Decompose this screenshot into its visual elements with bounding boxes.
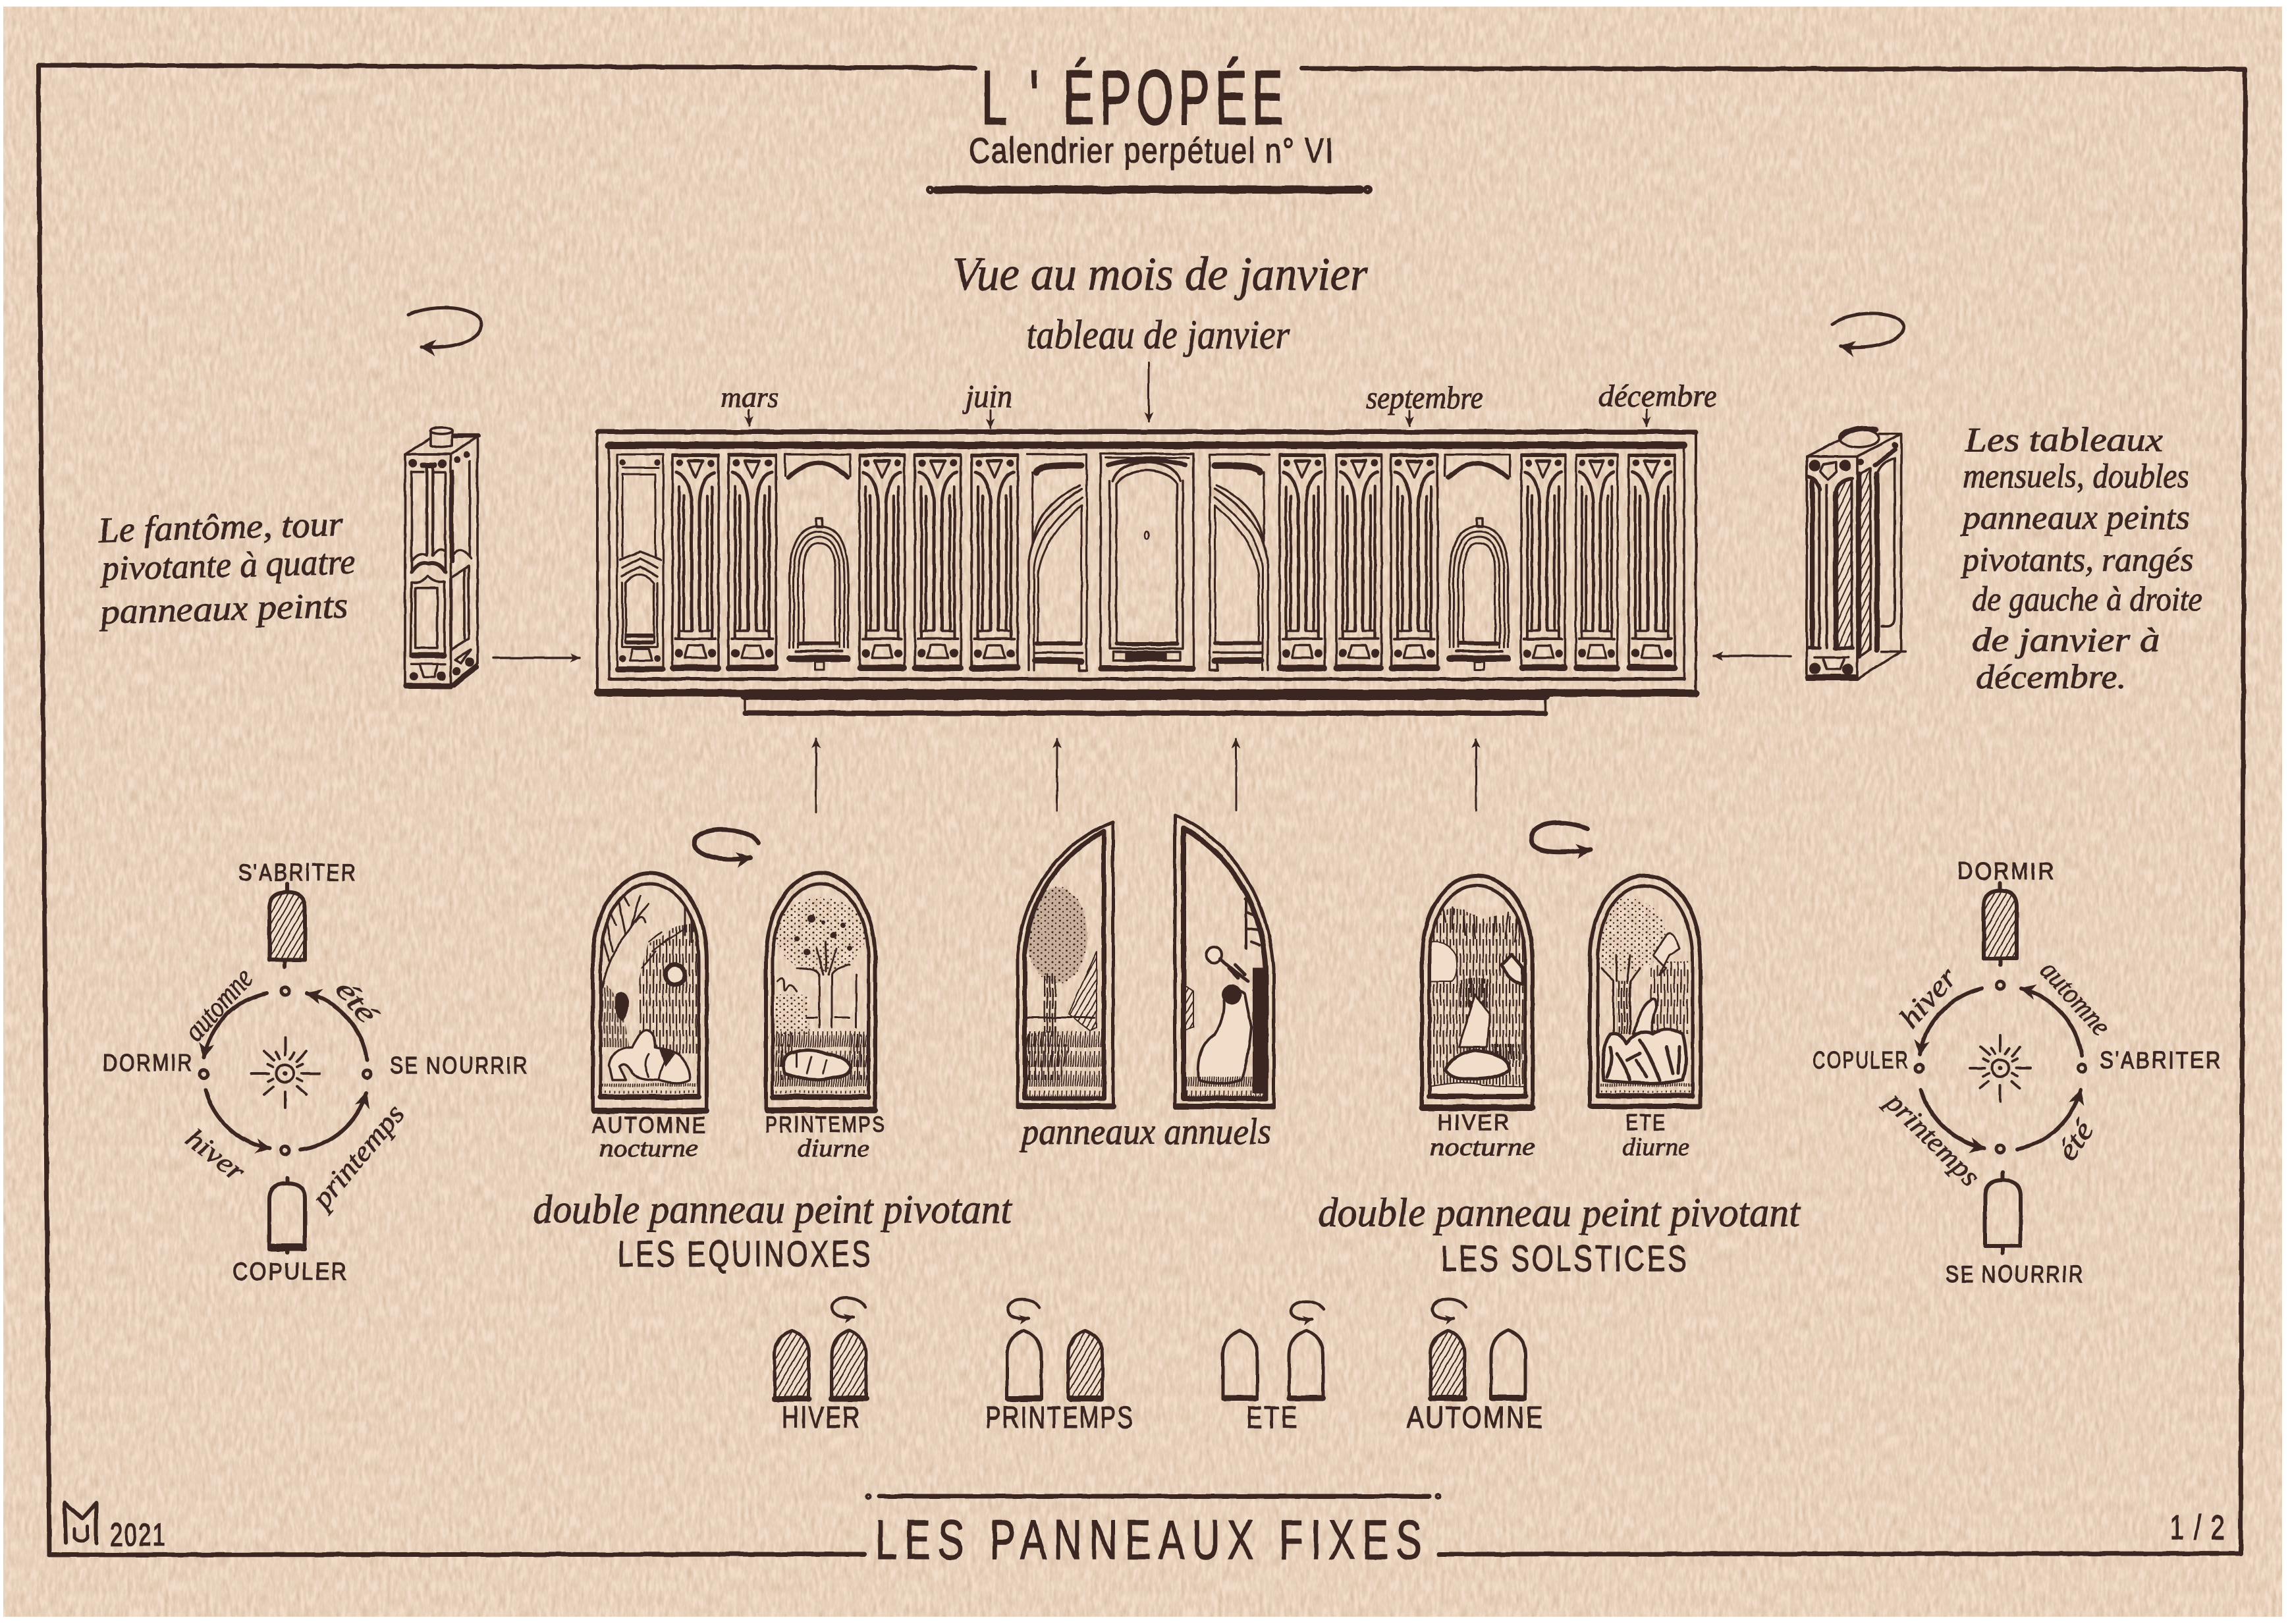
arched frame [1422, 876, 1533, 1108]
bell stems [269, 1178, 305, 1253]
title rule [928, 187, 1371, 192]
monthly panels [672, 454, 1675, 670]
bell: dormir hatched [1984, 883, 2017, 965]
panel 1: january tower face [617, 454, 663, 670]
label: copuler: COPULER [1813, 1046, 1909, 1073]
season key: été: ETE [1246, 1400, 1299, 1434]
month label: décembre: décembre [1598, 379, 1717, 414]
bell: se nourrir plain [1985, 1180, 2021, 1246]
sun icon [251, 1037, 319, 1108]
panel: été diurne [1589, 876, 1701, 1106]
label: été diurne: diurne [1622, 1133, 1689, 1161]
text: le fantôme: pivotante à quatre [99, 542, 356, 588]
rotation arrow: solstices [1531, 823, 1591, 852]
rotation arrow: ghost tower [408, 308, 481, 348]
monogram [65, 1503, 96, 1543]
cycle diagram: left [103, 859, 529, 1285]
scene [1589, 898, 1691, 1093]
month label: septembre: septembre [1366, 381, 1483, 416]
rotation arrow: equinoxes [695, 830, 759, 859]
sun icon [1970, 1035, 2031, 1101]
title: L ' ÉPOPÉE [981, 55, 1289, 140]
main calendar cabinet [597, 431, 1696, 715]
label: copuler: COPULER [232, 1258, 348, 1285]
cabinet frame [597, 431, 1696, 715]
heading: les equinoxes: LES EQUINOXES [618, 1233, 873, 1274]
arched frame [1590, 876, 1701, 1106]
center panel [1101, 454, 1193, 670]
label: s'abriter: S'ABRITER [238, 859, 357, 886]
subtitle: Calendrier perpétuel n° VI [969, 131, 1334, 171]
season: été: été [329, 973, 385, 1031]
label: se nourrir: SE NOURRIR [1946, 1260, 2085, 1287]
heading: les solstices: LES SOLSTICES [1441, 1237, 1689, 1279]
panel: printemps diurne [766, 873, 875, 1110]
label: panneaux annuels: panneaux annuels [1019, 1112, 1271, 1152]
label: dormir: DORMIR [103, 1049, 194, 1076]
season: été: été [2051, 1114, 2101, 1166]
season: automne: automne [177, 961, 259, 1047]
arrows up from panels to cabinet [816, 739, 1476, 812]
scene [1025, 886, 1101, 1098]
arched frame [1018, 822, 1113, 1108]
bell: copuler plain [269, 1183, 305, 1249]
season: hiver: hiver [1893, 961, 1963, 1035]
label: printemps diurne: PRINTEMPS [765, 1112, 886, 1137]
label: hiver nocturne [1430, 1110, 1535, 1161]
footer title: LES PANNEAUX FIXES [875, 1509, 1429, 1571]
label: automne nocturne: nocturne [599, 1135, 698, 1162]
label: tableau de janvier: tableau de janvier [1026, 313, 1290, 358]
scene [601, 894, 699, 1095]
heading: vue au mois de janvier: Vue au mois de janvier [952, 248, 1369, 300]
year: 2021 [110, 1518, 167, 1553]
season: automne: automne [2034, 954, 2117, 1042]
illustration: right tower [1807, 429, 1905, 680]
season: hiver: hiver [179, 1122, 252, 1188]
month label: juin: juin [962, 377, 1012, 414]
season key: automne: AUTOMNE [1407, 1400, 1544, 1434]
text: les tableaux mensuels [1960, 421, 2202, 696]
text: les tableaux mensuels: pivotants, rangés [1960, 541, 2193, 579]
season key: printemps: PRINTEMPS [985, 1400, 1134, 1434]
label: été diurne: ETE [1625, 1110, 1667, 1135]
label: hiver nocturne: HIVER [1437, 1110, 1511, 1135]
bell stems [1985, 1172, 2021, 1253]
month label: mars: mars [721, 381, 779, 414]
arrow: tableau de janvier [1147, 363, 1150, 421]
arched frame [593, 873, 707, 1111]
seasonal arcs and nodes [200, 987, 371, 1154]
page number: 1 / 2 [2170, 1509, 2226, 1547]
panel: hiver nocturne [1422, 876, 1533, 1108]
seasonal arcs and nodes [1915, 981, 2086, 1153]
text: les tableaux mensuels: panneaux peints [1960, 499, 2189, 537]
panel: automne nocturne [593, 873, 707, 1111]
scene [774, 898, 867, 1093]
season: printemps: printemps [304, 1098, 411, 1216]
label: s'abriter: S'ABRITER [2100, 1046, 2222, 1073]
bell: s'abriter hatched [269, 884, 305, 967]
season: printemps: printemps [1878, 1085, 1986, 1193]
label: automne nocturne [592, 1113, 707, 1162]
label: automne nocturne: AUTOMNE [592, 1113, 707, 1138]
text: les tableaux mensuels: décembre. [1976, 659, 2127, 696]
label: dormir: DORMIR [1957, 857, 2056, 884]
caption: double panneau solstices: double panneau peint pivotant [1318, 1191, 1801, 1235]
label: se nourrir: SE NOURRIR [390, 1052, 529, 1079]
arched frame [1175, 815, 1274, 1108]
panel: annuel droit [1175, 815, 1274, 1108]
illustration: left tower [405, 427, 479, 687]
caption: double panneau équinoxes: double panneau peint pivotant [533, 1187, 1013, 1232]
cycle diagram: right [1813, 857, 2222, 1287]
season key: été [1223, 1301, 1324, 1434]
footer rule [866, 1494, 1440, 1499]
text: les tableaux mensuels: de gauche à droite [1972, 581, 2202, 618]
season key: automne [1407, 1299, 1544, 1434]
text: les tableaux mensuels: de janvier à [1972, 622, 2160, 659]
label: printemps diurne: diurne [798, 1135, 869, 1162]
arrow: panels to frame right [1714, 655, 1791, 657]
season key: hiver [775, 1298, 866, 1434]
arrow: tower to frame left [493, 657, 580, 659]
label: été diurne [1622, 1110, 1689, 1161]
month label: juin [962, 377, 1012, 428]
arched frame [766, 873, 875, 1110]
text: les tableaux mensuels: Les tableaux [1965, 421, 2163, 459]
label: hiver nocturne: nocturne [1430, 1133, 1535, 1161]
panel: annuel gauche [1018, 822, 1113, 1108]
text: le fantôme: Le fantôme, tour [97, 504, 344, 550]
scene [1431, 906, 1524, 1096]
scene [1184, 882, 1266, 1098]
text: le fantôme: panneaux peints [97, 585, 348, 632]
text: les tableaux mensuels: mensuels, doubles [1963, 458, 2189, 495]
season key: printemps [985, 1299, 1134, 1434]
season key: hiver: HIVER [782, 1400, 861, 1434]
rotation arrow: monthly panels [1832, 313, 1903, 348]
label: printemps diurne [765, 1112, 886, 1162]
text: le fantôme [95, 504, 357, 632]
